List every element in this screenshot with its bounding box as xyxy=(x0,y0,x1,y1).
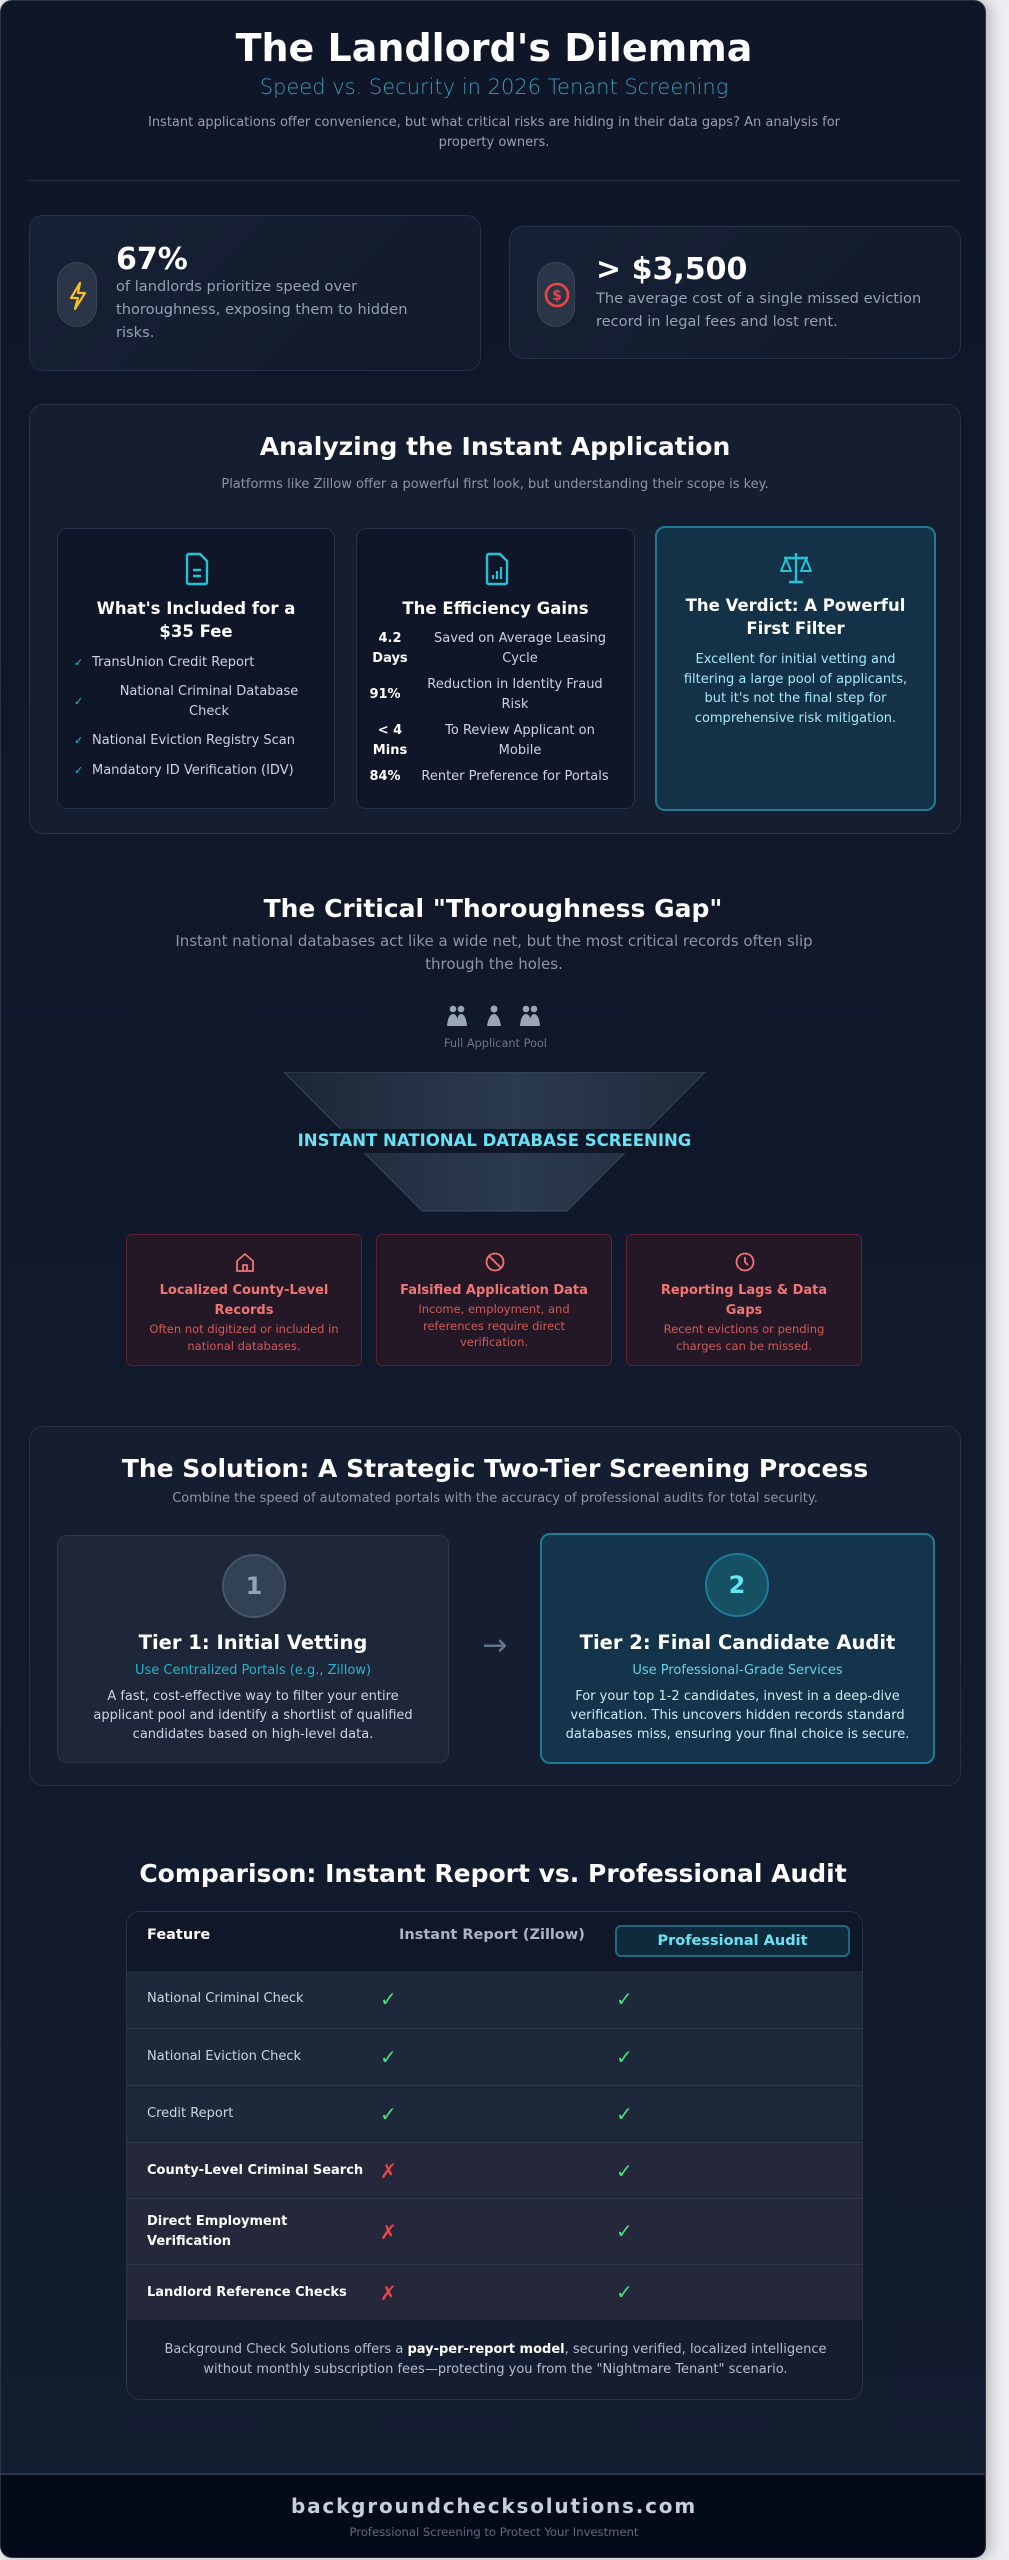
row: credit: ✓ xyxy=(380,2102,397,2126)
stat text: thoroughness, exposing them to hidden xyxy=(116,301,408,318)
efficiency stats: Renter Preference for Portals xyxy=(421,769,609,784)
verdict text xyxy=(684,652,907,726)
card: reporting lags: Recent evictions or pending xyxy=(664,1322,824,1336)
tier 1 card: Tier 1: Initial Vetting xyxy=(139,1631,367,1654)
arrow: → xyxy=(482,1628,508,1663)
row: landlord reference: ✓ xyxy=(616,2280,633,2304)
panel: two-tier solution xyxy=(29,1426,961,1786)
stat text: record in legal fees and lost rent. xyxy=(596,313,838,330)
row: employment: Verification xyxy=(147,2234,231,2249)
icon: house xyxy=(236,1253,254,1272)
row: national eviction: ✓ xyxy=(380,2045,397,2069)
table footnote: Background Check Solutions offers a pay-per-report model, securing verified, localized intelligence xyxy=(164,2342,826,2357)
title: The Landlord's Dilemma xyxy=(236,26,752,70)
efficiency stats: Risk xyxy=(502,697,528,712)
subtitle: Speed vs. Security in 2026 Tenant Screening xyxy=(260,75,728,99)
checklist: ✓ xyxy=(74,656,83,669)
panel: analyzing the instant application xyxy=(29,404,961,834)
verdict text: Excellent for initial vetting and xyxy=(696,652,895,667)
stat text: The average cost of a single missed eviction xyxy=(596,290,921,307)
card: county records xyxy=(126,1234,362,1366)
card: county records: Localized County-Level xyxy=(160,1283,328,1298)
row: credit xyxy=(127,2085,863,2142)
stat number: > $3,500 xyxy=(596,252,747,287)
subheading: Combine the speed of automated portals with the accuracy of professional audits for total security. xyxy=(172,1491,818,1506)
card: reporting lags: Gaps xyxy=(726,1303,762,1318)
intro text: Instant applications offer convenience, but what critical risks are hiding in their data gaps? An analysis for xyxy=(148,115,840,130)
card: what's included: What's Included for a xyxy=(97,599,295,618)
tier 1 card xyxy=(57,1535,449,1763)
badge 1: 1 xyxy=(246,1572,262,1600)
card: efficiency gains: The Efficiency Gains xyxy=(402,599,589,618)
tier 1 card: A fast, cost-effective way to filter your entire xyxy=(107,1689,399,1704)
efficiency stats: 91% xyxy=(369,687,401,702)
table footnote xyxy=(164,2342,826,2377)
efficiency stats: Mins xyxy=(373,743,407,758)
card: verdict: The Verdict: A Powerful xyxy=(686,596,905,615)
subheading: Platforms like Zillow offer a powerful first look, but understanding their scope is key. xyxy=(221,477,769,492)
row: national criminal xyxy=(127,1971,863,2028)
tier 1 card: applicant pool and identify a shortlist of qualified xyxy=(93,1708,413,1723)
intro text xyxy=(148,115,840,150)
funnel label: INSTANT NATIONAL DATABASE SCREENING xyxy=(298,1131,691,1150)
header row: Professional Audit xyxy=(657,1933,808,1949)
icon: document xyxy=(186,552,208,586)
checklist xyxy=(74,655,298,778)
row: county criminal xyxy=(127,2142,863,2198)
verdict text: comprehensive risk mitigation. xyxy=(695,711,896,726)
checklist: National Criminal Database xyxy=(120,684,298,699)
row: county criminal: ✗ xyxy=(380,2159,397,2183)
section subheading: through the holes. xyxy=(425,955,563,973)
card: verdict xyxy=(655,526,936,811)
icon: dollar xyxy=(537,262,575,327)
badge 2: 2 xyxy=(729,1571,745,1599)
card: reporting lags: charges can be missed. xyxy=(676,1338,812,1352)
row: credit: ✓ xyxy=(616,2102,633,2126)
stat text xyxy=(596,290,921,330)
card: reporting lags: Reporting Lags & Data xyxy=(661,1283,827,1298)
row: employment xyxy=(127,2198,863,2264)
icon: chart doc xyxy=(486,552,508,586)
section subheading xyxy=(175,932,813,973)
row: national criminal: National Criminal Check xyxy=(147,1991,304,2006)
row: employment: ✗ xyxy=(380,2220,397,2244)
card: what's included: $35 Fee xyxy=(159,622,233,641)
badge 2 xyxy=(705,1553,769,1617)
efficiency stats: Days xyxy=(372,651,408,666)
footer: Professional Screening to Protect Your Investment xyxy=(350,2525,638,2539)
card: county records: Records xyxy=(215,1303,273,1318)
row: national eviction xyxy=(127,2028,863,2085)
stat card: $3,500 xyxy=(509,226,961,359)
table footnote: without monthly subscription fees—protecting you from the "Nightmare Tenant" scenario. xyxy=(203,2362,788,2377)
tier 1 card: candidates based on high-level data. xyxy=(133,1727,373,1742)
row: county criminal: ✓ xyxy=(616,2159,633,2183)
tier 2 card: Tier 2: Final Candidate Audit xyxy=(580,1631,895,1654)
efficiency stats: Cycle xyxy=(502,651,538,666)
efficiency stats: Saved on Average Leasing xyxy=(434,631,606,646)
efficiency stats: Reduction in Identity Fraud xyxy=(427,677,603,692)
icon: applicant pool: Full Applicant Pool xyxy=(444,1037,547,1050)
icon: lightning xyxy=(57,262,97,327)
header row xyxy=(127,1912,864,1971)
card: falsified data: Income, employment, and xyxy=(418,1302,570,1316)
icon: prohibited xyxy=(486,1252,504,1272)
stat text: of landlords prioritize speed over xyxy=(116,278,357,295)
icon: scales xyxy=(780,553,812,584)
card: falsified data: references require direct xyxy=(423,1318,565,1332)
checklist: Check xyxy=(189,704,229,719)
footer: backgroundchecksolutions.com xyxy=(291,2494,697,2518)
heading: Analyzing the Instant Application xyxy=(260,432,730,461)
tier 2 card: verification. This uncovers hidden records standard xyxy=(570,1708,905,1723)
row: national eviction: National Eviction Check xyxy=(147,2049,301,2064)
efficiency stats: 84% xyxy=(369,769,401,784)
card: reporting lags xyxy=(626,1234,862,1366)
efficiency stats: < 4 xyxy=(378,723,402,738)
icon: clock xyxy=(736,1252,754,1272)
row: credit: Credit Report xyxy=(147,2106,233,2121)
card: what's included xyxy=(57,528,335,809)
card: verdict: First Filter xyxy=(746,619,845,638)
intro text: property owners. xyxy=(439,135,549,150)
row: landlord reference xyxy=(127,2264,863,2320)
row: national criminal: ✓ xyxy=(616,1987,633,2011)
stat text xyxy=(116,278,408,341)
footer xyxy=(1,2473,987,2559)
icon: dollar: $ xyxy=(552,288,562,304)
efficiency stats: Mobile xyxy=(499,743,541,758)
tier 2 card: For your top 1-2 candidates, invest in a deep-dive xyxy=(575,1689,900,1704)
efficiency stats: To Review Applicant on xyxy=(445,723,595,738)
tier 2 card xyxy=(540,1533,935,1764)
row: national criminal: ✓ xyxy=(380,1987,397,2011)
checklist: Mandatory ID Verification (IDV) xyxy=(92,763,294,778)
header row: Instant Report (Zillow) xyxy=(399,1927,585,1943)
checklist: National Eviction Registry Scan xyxy=(92,733,295,748)
header row: Feature xyxy=(147,1927,210,1943)
card: falsified data xyxy=(376,1234,612,1366)
verdict text: but it's not the final step for xyxy=(704,691,887,706)
efficiency stats: 4.2 xyxy=(378,631,402,646)
comparison table xyxy=(126,1911,863,2400)
tier 2 card: databases miss, ensuring your final choice is secure. xyxy=(566,1727,909,1742)
card: county records: national databases. xyxy=(187,1338,301,1352)
row: national eviction: ✓ xyxy=(616,2045,633,2069)
checklist: ✓ xyxy=(74,734,83,747)
section heading: thoroughness gap: The Critical "Thoroughness Gap" xyxy=(264,894,722,923)
efficiency stats xyxy=(369,631,609,784)
card: efficiency gains xyxy=(356,528,635,809)
stat text: risks. xyxy=(116,324,154,341)
stat card: 67% xyxy=(29,215,481,371)
tier 1 card: Use Centralized Portals (e.g., Zillow) xyxy=(135,1663,371,1678)
checklist: TransUnion Credit Report xyxy=(92,655,254,670)
row: county criminal: County-Level Criminal Search xyxy=(147,2163,363,2178)
row: landlord reference: ✗ xyxy=(380,2281,397,2305)
card: county records: Often not digitized or included in xyxy=(149,1322,339,1336)
heading: The Solution: A Strategic Two-Tier Screening Process xyxy=(122,1454,868,1483)
row: employment: Direct Employment xyxy=(147,2214,287,2229)
verdict text: filtering a large pool of applicants, xyxy=(684,672,907,687)
checklist: ✓ xyxy=(74,695,83,708)
stat number: 67% xyxy=(116,242,188,277)
badge 1 xyxy=(222,1554,286,1618)
checklist: ✓ xyxy=(74,764,83,777)
tier 2 card: Use Professional-Grade Services xyxy=(632,1663,843,1678)
row: landlord reference: Landlord Reference Checks xyxy=(147,2285,347,2300)
funnel xyxy=(284,1072,706,1212)
row: employment: ✓ xyxy=(616,2219,633,2243)
icon: applicant pool xyxy=(444,1006,547,1050)
section heading: comparison: Comparison: Instant Report vs. Professional Audit xyxy=(139,1859,847,1888)
section subheading: Instant national databases act like a wide net, but the most critical records often slip xyxy=(175,932,813,950)
card: falsified data: Falsified Application Data xyxy=(400,1283,588,1298)
card: falsified data: verification. xyxy=(460,1335,528,1349)
